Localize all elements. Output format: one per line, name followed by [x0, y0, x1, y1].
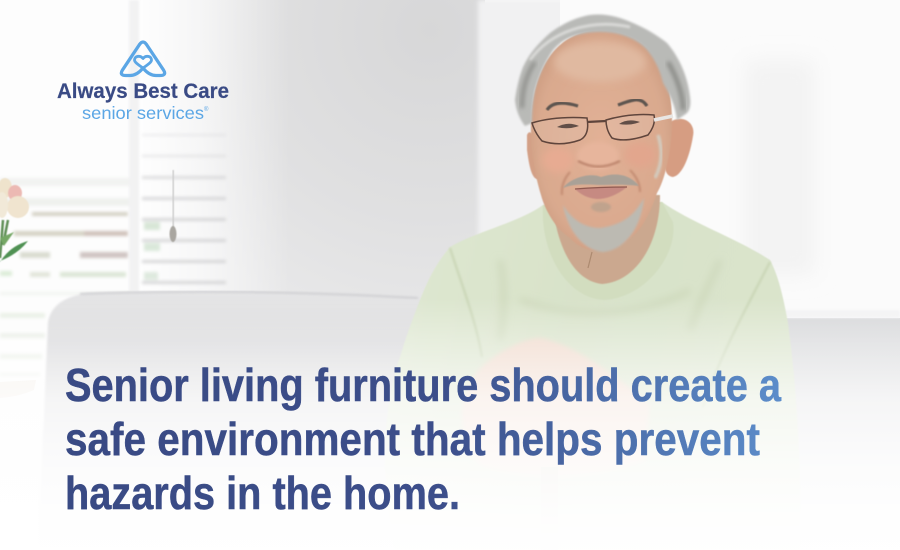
headline line 3: hazards in the home. [65, 467, 460, 519]
window blinds [0, 0, 226, 430]
hair highlights [530, 24, 630, 60]
headline line 2: safe environment that helps prevent [65, 413, 760, 465]
shirt soft folds [500, 260, 720, 340]
face [531, 30, 672, 251]
neck [552, 195, 660, 284]
sofa back right [780, 310, 900, 550]
blind cord [172, 170, 174, 230]
ears [664, 119, 693, 177]
cheeks [542, 147, 574, 173]
mouth [575, 187, 627, 199]
side table [0, 380, 36, 398]
hair [515, 14, 690, 126]
senior man portrait [385, 14, 800, 550]
window frame post [129, 0, 139, 292]
nose [577, 142, 619, 170]
goatee [563, 198, 644, 252]
logo [57, 42, 229, 123]
registered mark: ® [204, 106, 209, 113]
temple grey [655, 135, 661, 178]
shirt [385, 202, 800, 550]
logo tagline: senior services [82, 103, 204, 123]
headline [65, 359, 781, 519]
moustache [563, 174, 639, 188]
eyes [557, 124, 579, 128]
logo wordmark: Always Best Care [57, 80, 229, 103]
tulips [0, 178, 29, 262]
shirt seams [450, 248, 770, 407]
smile lines [562, 170, 640, 195]
hands on cane [462, 338, 650, 476]
cane [541, 467, 558, 550]
logo icon [121, 42, 165, 76]
eyebrows [547, 103, 578, 110]
sofa back left [38, 291, 430, 550]
forehead highlight [554, 42, 646, 82]
soul patch [591, 202, 611, 212]
blind slats panel [142, 134, 226, 284]
headline line 1: Senior living furniture should create a [65, 359, 781, 411]
glasses [532, 115, 654, 144]
white bottom fade [0, 298, 900, 550]
collar band [543, 202, 674, 300]
